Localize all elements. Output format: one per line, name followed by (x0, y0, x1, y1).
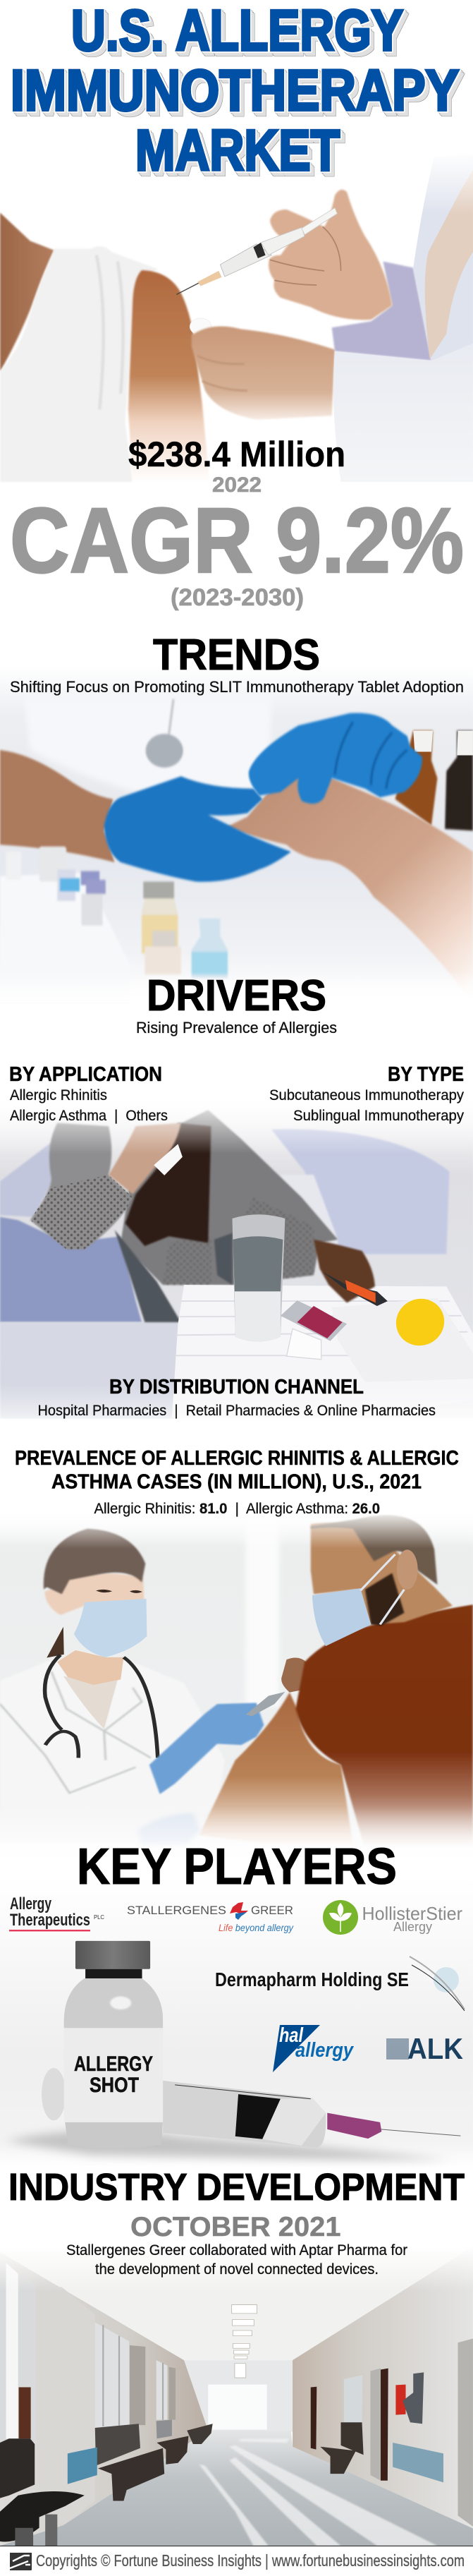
blue glove right (249, 713, 422, 804)
window stripes (246, 1519, 279, 1706)
right column (370, 2338, 473, 2527)
left window strip (6, 2263, 18, 2438)
patient arm (128, 270, 209, 482)
logo: ALK: ALK (407, 2032, 463, 2065)
photo backdrop (0, 1510, 473, 1868)
sample tray (0, 873, 130, 1003)
trends heading: TRENDS (153, 631, 320, 679)
panel: vaccination photo (0, 151, 473, 482)
bottle caps (413, 731, 473, 755)
development text: Stallergenes Greer collaborated with Aptar Pharma for (66, 2242, 407, 2258)
ceiling lights (232, 2305, 257, 2378)
left wall (0, 2252, 208, 2546)
sofa right (271, 1129, 450, 1254)
white tank top (0, 246, 159, 482)
logo: Stallergenes Greer: Life beyond allergy (219, 1922, 294, 1933)
white tray table (172, 1285, 473, 1417)
by application: BY APPLICATION (9, 1063, 162, 1086)
hand with thermometer (314, 1240, 388, 1306)
forecast period: (2023-2030) (171, 584, 304, 611)
title: U.S. ALLERGY (71, 0, 403, 63)
brochure rack (403, 2372, 424, 2424)
year: 2022 (212, 473, 262, 497)
coat fade (417, 151, 473, 214)
jeans (115, 1230, 232, 1322)
by distribution channel (38, 1376, 436, 1419)
key players heading: KEY PLAYERS (77, 1839, 397, 1895)
sofa back (281, 1175, 338, 1250)
man arm (199, 1693, 353, 1844)
vial label (64, 2028, 163, 2122)
syringe (163, 2081, 460, 2148)
ponytail (47, 1627, 64, 1658)
logo: Allergy Therapeutics: PLC (94, 1914, 104, 1921)
right mirror (344, 2375, 362, 2422)
hand (109, 1123, 181, 1195)
shadows (6, 2130, 453, 2160)
panel: hospital hallway photo (0, 2245, 473, 2546)
photo backdrop (0, 1877, 473, 2169)
mirror door (19, 2387, 31, 2438)
bottom fade (0, 2141, 473, 2169)
by type (269, 1063, 464, 1124)
coat folds (0, 1671, 151, 1793)
title: MARKET (135, 119, 340, 183)
upper hand creases (270, 226, 341, 285)
blister pills (281, 1300, 347, 1360)
by type: Sublingual Immunotherapy (293, 1108, 464, 1124)
vial glass (64, 1978, 163, 2028)
by type: BY TYPE (388, 1063, 464, 1086)
logo: Allergy Therapeutics: Allergy (10, 1894, 51, 1913)
top fade (0, 1508, 473, 1549)
mask straps (360, 1554, 404, 1624)
prevalence figures: Allergic Rhinitis: 81.0 | Allergic Asthma: 26.0 (94, 1501, 380, 1517)
glass of water (232, 1214, 285, 1341)
logo: Stallergenes Greer: GREER (251, 1904, 293, 1917)
dark bottle (445, 731, 473, 830)
vial highlight (110, 1997, 131, 2009)
prevalence heading (15, 1447, 459, 1493)
patient arm (226, 775, 473, 1003)
pillow blue (0, 1217, 142, 1322)
logo: HollisterStier Allergy: Allergy (393, 1920, 432, 1934)
panel: trends photo (0, 666, 473, 1003)
undershirt (63, 1676, 118, 1729)
by application (9, 1063, 168, 1124)
floor (0, 2431, 473, 2546)
doctor coat (413, 155, 473, 362)
doctor coat (0, 1657, 225, 1842)
stethoscope (45, 1655, 158, 1758)
second glove (137, 1813, 201, 1844)
logo: HollisterStier Allergy (323, 1900, 462, 1935)
sweater arm (30, 1123, 133, 1250)
man head (311, 1523, 453, 1624)
vial neck (85, 1969, 142, 1979)
doctor glove (149, 1703, 264, 1794)
lavender sleeve (332, 262, 431, 361)
drivers text: Rising Prevalence of Allergies (136, 1019, 337, 1036)
hair (125, 1123, 211, 1246)
face (44, 1573, 145, 1615)
mid column (130, 2345, 176, 2425)
development text (66, 2242, 407, 2278)
near seats (0, 2438, 85, 2546)
patient shoulder (0, 212, 54, 372)
blue wall guards right (393, 2443, 443, 2482)
right wall (293, 2247, 473, 2529)
development text: the development of novel connected devices. (95, 2261, 379, 2278)
by application: Allergic Asthma | Others (10, 1108, 168, 1124)
seat row left (95, 2419, 213, 2501)
left mirror panels (0, 2258, 35, 2450)
glove finger shading (335, 722, 407, 789)
man hair (311, 1515, 437, 1585)
woman mask (74, 1599, 147, 1657)
drivers heading: DRIVERS (147, 972, 326, 1020)
panel: drivers photo (0, 1092, 473, 1417)
bottom fade (0, 1385, 473, 1417)
table slats (174, 1301, 467, 1355)
blanket knit (163, 1197, 314, 1285)
logo: Dermapharm Holding SE: Dermapharm Holding SE (215, 1969, 409, 1990)
plunger disc (42, 2068, 66, 2120)
right bench (320, 2422, 364, 2474)
vial cap (75, 1941, 150, 1969)
man beard (365, 1573, 404, 1626)
lower hand (192, 327, 335, 420)
syringe (246, 1692, 285, 1716)
cotton swab (190, 318, 211, 335)
neck (57, 1650, 123, 1685)
top fade (0, 2245, 473, 2291)
top fade (0, 1092, 473, 1154)
market value: $238.4 Million (128, 435, 345, 474)
upper hand (269, 190, 392, 320)
floor light streaks (199, 2438, 437, 2546)
small vials (6, 847, 106, 926)
right doors (311, 2369, 388, 2481)
logo: Stallergenes Greer: STALLERGENES (127, 1904, 226, 1917)
mid windows (95, 2322, 167, 2428)
by distribution channel: BY DISTRIBUTION CHANNEL (109, 1376, 364, 1398)
bottom fade (0, 971, 473, 1003)
eyes (96, 1590, 142, 1593)
coat inner beige (425, 170, 473, 359)
logo: Fortune Business Insights (10, 2553, 32, 2570)
by type: Subcutaneous Immunotherapy (269, 1087, 464, 1103)
bottom fade (0, 1807, 473, 1868)
trends text: Shifting Focus on Promoting SLIT Immunotherapy Tablet Adoption (10, 678, 464, 696)
sweater knit (30, 1175, 133, 1250)
ceiling (0, 2247, 473, 2360)
panel: prevalence photo (0, 1508, 473, 1868)
man shirt (295, 1604, 473, 1849)
vial label text: SHOT (90, 2074, 139, 2097)
pillow back (0, 1142, 54, 1217)
sofa seat (0, 1322, 184, 1417)
man ear (397, 1549, 418, 1590)
fingers holding arm (281, 1658, 306, 1693)
by distribution channel: Hospital Pharmacies | Retail Pharmacies & Online Pharmacies (38, 1403, 436, 1419)
photo backdrop (0, 1094, 473, 1417)
man mask (312, 1588, 371, 1646)
table cloth (332, 1298, 473, 1382)
blue glove left (104, 776, 291, 882)
left column (39, 2285, 95, 2525)
logo: ALK (386, 2032, 463, 2065)
syringe (176, 208, 337, 294)
logo: hal allergy: hal (279, 2024, 304, 2047)
poster (395, 2385, 406, 2415)
far window (208, 2385, 267, 2430)
vial base (65, 2121, 163, 2148)
window frames (103, 2325, 163, 2426)
logo: hal allergy (273, 2024, 355, 2072)
medicine vials (142, 882, 228, 978)
by application: Allergic Rhinitis (10, 1087, 107, 1103)
far wall (181, 2360, 294, 2432)
photo backdrop (0, 666, 473, 1003)
logo: HollisterStier Allergy: HollisterStier (362, 1903, 462, 1924)
logo: hal allergy: allergy (295, 2039, 355, 2062)
stethoscope (146, 699, 183, 768)
lower hand creases (197, 356, 247, 391)
doctor arm (0, 750, 115, 862)
coat lower (333, 344, 473, 482)
logo: Allergy Therapeutics (9, 1894, 104, 1931)
date: OCTOBER 2021 (130, 2212, 341, 2242)
title (11, 0, 459, 183)
prevalence heading: ASTHMA CASES (IN MILLION), U.S., 2021 (51, 1470, 422, 1493)
logo: Allergy Therapeutics: Therapeutics (10, 1911, 90, 1930)
vial label text (74, 2052, 153, 2097)
tank top folds (97, 255, 123, 409)
blanket (121, 1110, 338, 1285)
amber bottle (395, 731, 437, 826)
tissue (154, 1144, 183, 1175)
vial label text: ALLERGY (74, 2052, 153, 2076)
logo: Stallergenes Greer (127, 1902, 294, 1933)
panel: allergy shot photo (0, 1877, 473, 2169)
logo: Dermapharm Holding SE (215, 1957, 465, 2011)
doctor coat (24, 697, 271, 796)
lemon (393, 1295, 448, 1350)
blue wall guards left (68, 2448, 97, 2484)
hair (44, 1528, 145, 1594)
